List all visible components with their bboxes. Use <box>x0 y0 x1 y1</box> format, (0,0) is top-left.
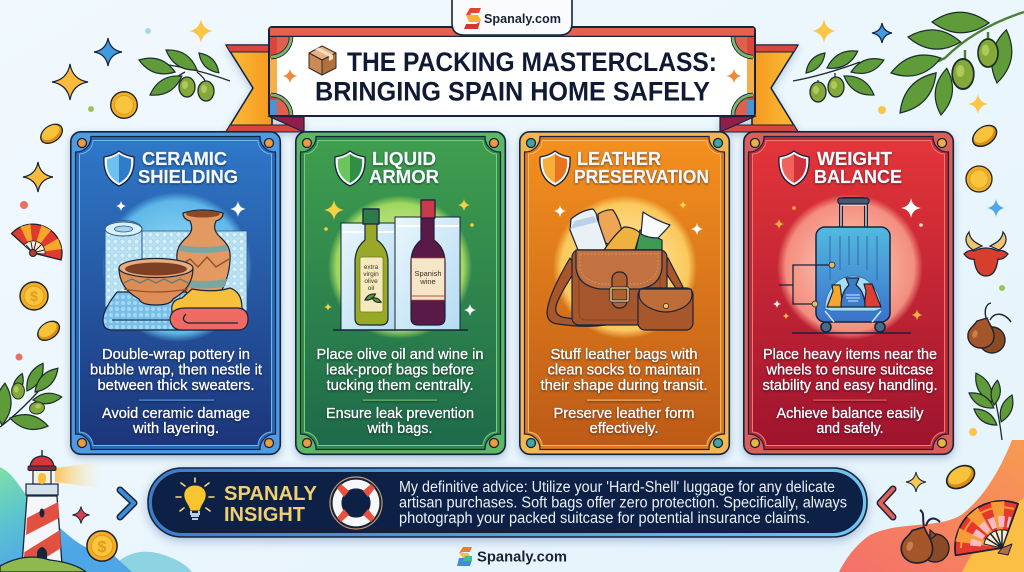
illustration: olive oil and wine <box>324 195 476 339</box>
icon: shield blue <box>104 151 134 186</box>
body text: Ensure leak prevention <box>326 406 474 422</box>
body text: wheels to ensure suitcase <box>765 362 934 378</box>
icon: Spanaly logo <box>457 547 472 566</box>
body text <box>540 347 708 437</box>
insight body text: My definitive advice: Utilize your 'Hard-Shell' luggage for any delicate <box>399 479 835 496</box>
bottom Spanaly logo: Spanaly.com <box>477 548 567 566</box>
banner frame <box>148 468 867 537</box>
top logo tab <box>452 0 572 35</box>
heading: LEATHER <box>577 149 661 169</box>
insight label: INSIGHT <box>224 504 305 526</box>
arrow: left chevron <box>120 490 134 517</box>
card frame red <box>744 132 953 454</box>
panel: leather preservation <box>520 132 729 454</box>
body text: and safely. <box>816 421 884 437</box>
body text: their shape during transit. <box>540 378 708 394</box>
insight banner <box>148 468 867 537</box>
heading: LIQUID <box>372 149 436 169</box>
icon: large fan <box>955 501 1018 555</box>
body text <box>316 347 484 437</box>
body text <box>762 347 938 437</box>
heading: WEIGHT <box>817 149 892 169</box>
right-side decorations <box>964 121 1017 440</box>
body text: Achieve balance easily <box>776 406 924 422</box>
left-side decorations: $ <box>30 288 38 304</box>
icon: light bulb <box>176 478 214 520</box>
lighthouse <box>0 450 100 572</box>
socks and cloths <box>570 209 670 250</box>
panel: ceramic shielding <box>71 132 280 454</box>
icon: Spanaly logo <box>464 8 481 29</box>
heading <box>814 149 902 187</box>
card frame blue <box>71 132 280 454</box>
heading: PRESERVATION <box>574 167 709 187</box>
small purse <box>638 288 693 330</box>
arrow: right chevron <box>880 489 893 517</box>
background hills bottom-left <box>0 467 192 572</box>
body text: with layering. <box>132 421 219 437</box>
body text: Stuff leather bags with <box>550 347 698 363</box>
heading <box>574 149 709 187</box>
heading: BALANCE <box>814 167 902 187</box>
icon: cardboard box <box>309 46 336 75</box>
top-left decorations <box>37 19 230 147</box>
bottom-left coin and spark: $ <box>98 539 107 556</box>
bottom-right decorations <box>901 461 1018 563</box>
background blobs bottom-right <box>839 440 1024 572</box>
insight label <box>224 483 318 526</box>
buckle strap <box>612 272 627 308</box>
body text: between thick sweaters. <box>98 378 254 394</box>
icon: shield green <box>335 151 365 186</box>
panel: weight balance <box>744 132 953 454</box>
illustration: pottery and bubble wrap <box>102 192 252 342</box>
top-right decorations <box>793 12 1024 120</box>
illustration: olive oil and wine: virgin <box>363 271 379 278</box>
heading: SHIELDING <box>138 167 238 187</box>
body text: Place olive oil and wine in <box>316 347 484 363</box>
shoulder strap <box>547 258 683 326</box>
title text <box>315 47 717 106</box>
body text: with bags. <box>367 421 432 437</box>
top logo tab: Spanaly.com <box>484 11 561 26</box>
title text: BRINGING SPAIN HOME SAFELY <box>315 76 710 106</box>
panel: liquid armor <box>296 132 505 454</box>
body text: clean socks to maintain <box>548 362 700 378</box>
heading: CERAMIC <box>142 149 227 169</box>
body text: Double-wrap pottery in <box>102 347 250 363</box>
satchel flap <box>576 250 662 289</box>
body text: Preserve leather form <box>554 406 694 422</box>
body text <box>90 347 262 437</box>
heading <box>369 149 439 187</box>
heading <box>138 149 238 187</box>
body text: Avoid ceramic damage <box>102 406 250 422</box>
card frame green <box>296 132 505 454</box>
illustration: olive oil and wine: wine <box>419 277 436 286</box>
bottom-left coin and spark <box>72 506 117 561</box>
icon: castanets <box>968 303 1011 353</box>
body text: Place heavy items near the <box>763 347 937 363</box>
illustration: olive oil and wine: Spanish <box>414 269 442 278</box>
heading: ARMOR <box>369 167 439 187</box>
illustration: olive oil and wine: oil <box>368 285 375 292</box>
icon: large castanets <box>901 510 949 563</box>
banner ribbon tails <box>226 45 798 132</box>
left-side decorations <box>0 162 63 433</box>
body text: stability and easy handling. <box>762 378 938 394</box>
icon: shield red <box>779 151 809 186</box>
insight body text: photograph your packed suitcase for potential insurance claims. <box>399 510 810 527</box>
icon: bull head <box>964 232 1008 276</box>
banner main plate <box>269 27 755 116</box>
card frame orange <box>520 132 729 454</box>
title banner <box>226 27 798 132</box>
insight label: SPANALY <box>224 483 318 505</box>
body text: bubble wrap, then nestle it <box>90 362 262 378</box>
icon: shield orange <box>540 151 570 186</box>
illustration: olive oil and wine: olive <box>364 278 378 285</box>
body text: tucking them centrally. <box>326 378 474 394</box>
illustration: leather bag with socks <box>547 195 703 339</box>
illustration: balanced suitcase <box>773 194 923 340</box>
insight body text: artisan purchases. Soft bags offer zero protection. Specifically, always <box>399 494 847 512</box>
body text: leak-proof bags before <box>326 362 474 378</box>
icon: life ring <box>330 477 382 529</box>
illustration: olive oil and wine: extra <box>364 264 379 271</box>
title text: THE PACKING MASTERCLASS: <box>347 47 717 77</box>
insight body text <box>399 479 847 527</box>
body text: effectively. <box>590 421 658 437</box>
satchel body <box>572 250 667 325</box>
